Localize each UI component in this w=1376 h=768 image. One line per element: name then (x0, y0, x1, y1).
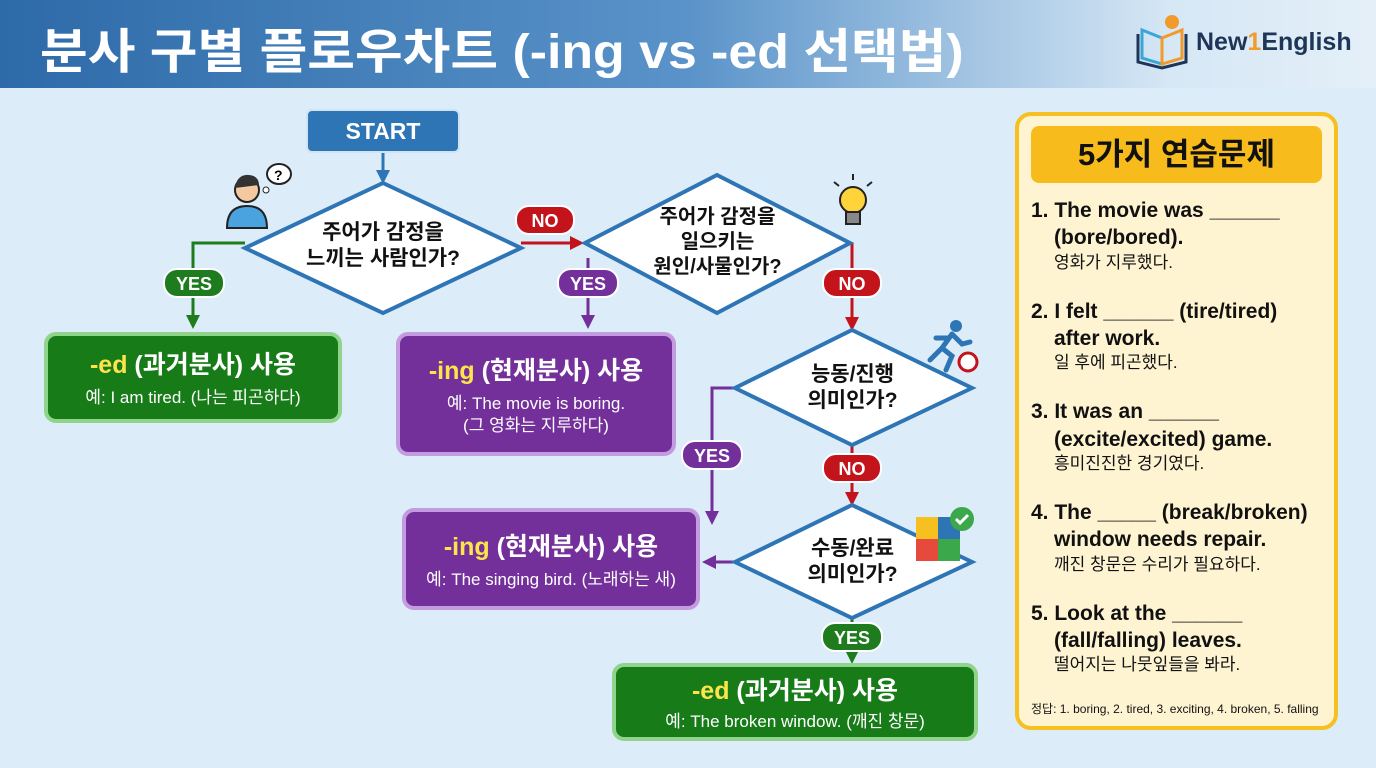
question 3: 능동/진행 (811, 363, 894, 386)
question list: after work. (1054, 327, 1160, 350)
pill: yes 2: YES (570, 274, 606, 294)
question 2: 원인/사물인가? (653, 256, 782, 278)
question 1 (306, 221, 460, 270)
question list: (excite/excited) game. (1054, 428, 1272, 451)
result: ed 2: -ed (과거분사) 사용 (692, 677, 898, 705)
pill: yes 4: YES (834, 628, 870, 648)
icon: puzzle (916, 507, 974, 561)
pill: yes 1 (163, 268, 225, 298)
pill: no 3: NO (838, 459, 866, 479)
question list (1031, 199, 1308, 674)
question 4: 수동/완료 (811, 537, 894, 560)
icon: person thinking (226, 163, 292, 229)
question list: 깨진 창문은 수리가 필요하다. (1054, 555, 1261, 574)
result: ed 1: 예: I am tired. (나는 피곤하다) (85, 388, 301, 407)
question list: 떨어지는 나뭇잎들을 봐라. (1054, 655, 1240, 674)
result: ed 2: 예: The broken window. (깨진 창문) (665, 712, 925, 731)
start box: START (346, 118, 420, 144)
question list: (bore/bored). (1054, 226, 1184, 249)
question list: 일 후에 피곤했다. (1054, 353, 1178, 372)
question 3: 의미인가? (807, 389, 898, 412)
result: ed 2 (612, 663, 978, 741)
question 4 (807, 537, 898, 586)
result: ing 1: -ing (현재분사) 사용 (429, 357, 643, 385)
pill: no 1 (515, 205, 575, 235)
panel heading: 5가지 연습문제 (1078, 137, 1275, 172)
question 1: 주어가 감정을 (322, 221, 444, 244)
question 2: 주어가 감정을 (660, 206, 775, 228)
start box (306, 109, 460, 153)
question list: 5. Look at the ______ (1031, 602, 1242, 625)
pill: yes 3: YES (694, 446, 730, 466)
result: ing 1: 예: The movie is boring. (447, 394, 625, 413)
result: ed 1 (44, 332, 342, 423)
pill: yes 1: YES (176, 274, 212, 294)
icon: lightbulb (833, 174, 873, 225)
question 2: 일으키는 (681, 231, 754, 253)
question list: 4. The _____ (break/broken) (1031, 501, 1308, 524)
question 1: 느끼는 사람인가? (306, 247, 460, 270)
pill: no 2 (822, 268, 882, 298)
pill: no 2: NO (838, 274, 866, 294)
result: ed 1: -ed (과거분사) 사용 (90, 351, 296, 379)
question 3 (807, 363, 898, 412)
question list: 흥미진진한 경기였다. (1054, 454, 1204, 473)
question list: (fall/falling) leaves. (1054, 629, 1242, 652)
answers: 정답: 1. boring, 2. tired, 3. exciting, 4. broken, 5. falling (1031, 702, 1319, 716)
icon: person thinking: ? (274, 167, 283, 183)
result: ing 2 (402, 508, 700, 610)
pill: yes 2 (557, 268, 619, 298)
result: ing 1 (396, 332, 676, 456)
logo (1136, 15, 1352, 70)
question list: 2. I felt ______ (tire/tired) (1031, 300, 1277, 323)
question list: 3. It was an ______ (1031, 400, 1219, 423)
pill: no 1: NO (532, 211, 558, 231)
question 2 (653, 206, 782, 278)
result: ing 2: -ing (현재분사) 사용 (444, 533, 658, 561)
flowchart lines (186, 153, 976, 663)
title: 분사 구별 플로우차트 (-ing vs -ed 선택법) (40, 26, 964, 79)
header banner (0, 0, 1376, 88)
result: ing 2: 예: The singing bird. (노래하는 새) (426, 570, 676, 589)
question list: 1. The movie was ______ (1031, 199, 1280, 222)
pill: yes 3 (681, 440, 743, 470)
pill: yes 4 (821, 622, 883, 652)
logo: New1English (1196, 28, 1352, 56)
result: ing 1: (그 영화는 지루하다) (463, 416, 609, 435)
panel heading (1031, 126, 1322, 183)
question 4: 의미인가? (807, 563, 898, 586)
pill: no 3 (822, 453, 882, 483)
question list: 영화가 지루했다. (1054, 253, 1173, 272)
question list: window needs repair. (1054, 528, 1266, 551)
icon: runner (928, 320, 978, 372)
panel: practice (1015, 112, 1338, 730)
